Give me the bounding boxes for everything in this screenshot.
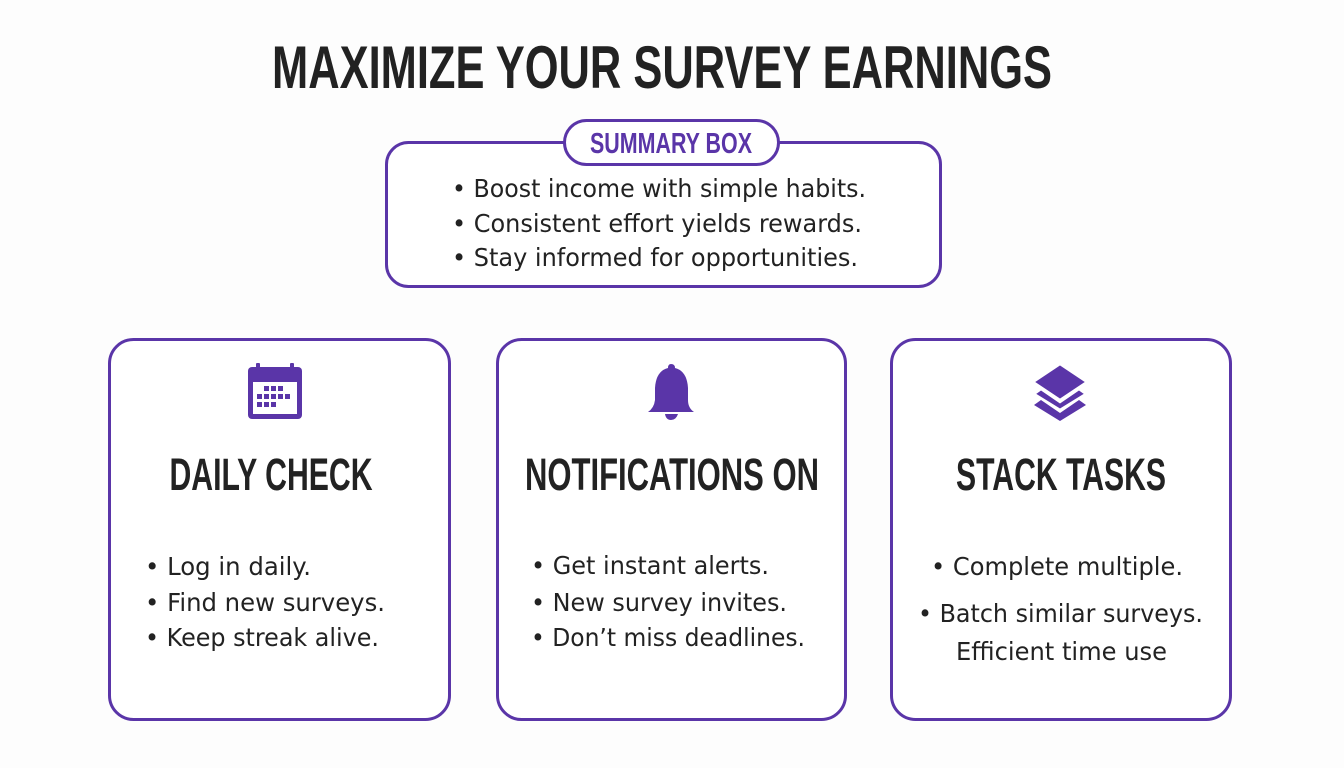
panel: summary box — [386, 120, 940, 286]
icon: bell — [648, 364, 694, 420]
icon: calendar — [248, 363, 302, 419]
bullets: stack tasks: • Complete multiple. — [931, 552, 1183, 581]
bullets: notifications on — [531, 551, 805, 652]
summary bullets — [452, 174, 866, 272]
summary bullets: • Boost income with simple habits. — [452, 174, 866, 203]
summary pill label: SUMMARY BOX — [590, 128, 752, 160]
bullets: stack tasks — [918, 552, 1203, 666]
bullets: daily check: • Log in daily. — [145, 552, 311, 581]
summary bullets: • Stay informed for opportunities. — [452, 243, 858, 272]
bullets: notifications on: • Get instant alerts. — [531, 551, 769, 580]
bullets: daily check — [145, 552, 385, 652]
bullets: notifications on: • Don’t miss deadlines. — [531, 623, 805, 652]
heading: notifications on: NOTIFICATIONS ON — [525, 449, 819, 500]
heading: daily check: DAILY CHECK — [170, 449, 373, 500]
summary bullets: • Consistent effort yields rewards. — [452, 209, 862, 238]
icon: layers — [1033, 364, 1087, 421]
title: MAXIMIZE YOUR SURVEY EARNINGS — [272, 34, 1052, 101]
panel: notifications on — [498, 340, 846, 720]
summary pill label — [564, 120, 778, 164]
bullets: stack tasks: Efficient time use — [956, 637, 1167, 666]
bullets: daily check: • Keep streak alive. — [145, 623, 379, 652]
bullets: notifications on: • New survey invites. — [531, 588, 787, 617]
panel: stack tasks — [892, 340, 1230, 720]
heading: stack tasks: STACK TASKS — [956, 449, 1166, 500]
bullets: daily check: • Find new surveys. — [145, 588, 385, 617]
panel: daily check — [110, 340, 450, 720]
bullets: stack tasks: • Batch similar surveys. — [918, 599, 1203, 628]
